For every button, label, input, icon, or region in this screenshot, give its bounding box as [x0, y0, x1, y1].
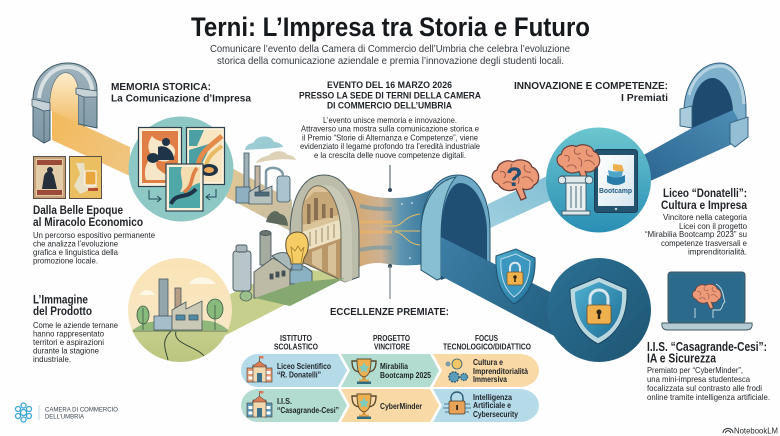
- heading: innovazione e competenze: INNOVAZIONE E COMPETENZE:: [514, 80, 668, 92]
- heading and text: immagine del prodotto: hanno rappresentato: [33, 328, 104, 338]
- connector: lower tunnel to eccellenze: [388, 264, 392, 299]
- heading: evento: PRESSO LA SEDE DI TERNI DELLA CAMERA: [299, 90, 481, 102]
- table row: donatelli: [241, 354, 539, 387]
- cell: istituto: I.I.S.: [277, 396, 292, 406]
- heading: memoria storica: La Comunicazione d’Impresa: [111, 92, 251, 104]
- right portal: [421, 175, 490, 280]
- heading: eccellenze premiate: ECCELLENZE PREMIATE:: [330, 306, 449, 318]
- table: column headers: PROGETTO: [373, 334, 410, 343]
- text: casagrande-cesi: online tramite intelligenza artificiale.: [647, 392, 770, 402]
- path: light blue innovation ribbon: [488, 170, 560, 229]
- icon: light bulb and lower factory: [233, 230, 345, 306]
- hill: [133, 320, 228, 330]
- cell: istituto: [241, 389, 347, 422]
- icon: right blue arch with ribbon: [640, 63, 748, 182]
- path: lower green ribbon: [226, 266, 345, 335]
- heading: evento: [299, 80, 481, 112]
- cell: focus: Immersiva: [473, 374, 507, 384]
- dark blue ribbon: [640, 110, 748, 182]
- heading and text: immagine del prodotto: territori e aspirazioni: [33, 337, 104, 347]
- text: evento description: Attraverso una mostra sulla comunicazione storica e: [301, 124, 479, 134]
- heading: memoria storica: MEMORIA STORICA:: [111, 81, 211, 93]
- table: column headers: ISTITUTO: [280, 334, 312, 343]
- column: [558, 176, 593, 215]
- icon: question brain: ?: [506, 162, 522, 192]
- river: [165, 331, 204, 360]
- text: evento description: evidenziato il legame profondo tra l’eredità industriale: [300, 141, 480, 151]
- icon: laptop with brain: [662, 272, 752, 330]
- clouds: [140, 290, 155, 295]
- path: lower blue ribbon: [441, 237, 562, 340]
- circle: bootcamp culture: [546, 128, 651, 232]
- cell: istituto: [241, 354, 347, 387]
- heading and text: belle epoque: [33, 203, 155, 266]
- factory: [154, 279, 202, 330]
- tunnel between past and future: [348, 186, 436, 272]
- heading: evento: DI COMMERCIO DELL’UMBRIA: [327, 100, 452, 112]
- bulb: [286, 232, 308, 264]
- text: liceo donatelli: imprenditorialità.: [688, 246, 747, 256]
- icon: upper factory: [236, 153, 290, 226]
- table: column headers: TECNOLOGICO/DIDATTICO: [443, 342, 531, 352]
- poster: teal: [186, 128, 224, 184]
- text: casagrande-cesi: [647, 340, 770, 402]
- heading and text: immagine del prodotto: Come le aziende ternane: [33, 320, 118, 330]
- heading and text: belle epoque: grafica e linguistica della: [33, 247, 118, 257]
- brain on column: [557, 145, 600, 182]
- logo: camera di commercio: DELL’UMBRIA: [45, 414, 85, 420]
- text: casagrande-cesi: Premiato per “CyberMinder”,: [647, 365, 743, 375]
- cell: istituto: “R. Donatelli”: [277, 370, 321, 380]
- trees: [137, 299, 223, 330]
- text: liceo donatelli: “Mirabilia Bootcamp 2023” su: [645, 229, 747, 239]
- cell: progetto: CyberMinder: [380, 401, 423, 411]
- circle: poster exhibition: [128, 116, 234, 222]
- circle: factory landscape: [128, 258, 232, 362]
- heading: memoria storica: [111, 81, 251, 104]
- table row: casagrande: [241, 389, 539, 422]
- text: evento description: L’evento unisce memoria e innovazione.: [323, 115, 457, 125]
- left portal with industrial scene: [290, 175, 359, 282]
- icon: left stone arch: [32, 63, 97, 143]
- logo: camera di commercio: CAMERA DI COMMERCIO: [45, 406, 118, 414]
- text: liceo donatelli: Cultura e Impresa: [661, 198, 747, 212]
- text: liceo donatelli: competenze trasversali e: [661, 238, 747, 248]
- cell: focus: Imprenditorialità: [473, 366, 528, 376]
- table: column headers: FOCUS: [475, 334, 499, 343]
- heading and text: belle epoque: Un percorso espositivo permanente: [33, 230, 155, 240]
- heading and text: immagine del prodotto: L’Immagine: [33, 292, 88, 306]
- cell: focus: Cybersecurity: [473, 409, 518, 419]
- poster: orange: [138, 128, 182, 186]
- text: liceo donatelli: [645, 186, 747, 256]
- tablet: Bootcamp: [599, 188, 632, 195]
- heading and text: belle epoque: promozione locale.: [33, 256, 98, 266]
- heading and text: belle epoque: Dalla Belle Epoque: [33, 203, 123, 217]
- cell: istituto: Liceo Scientifico: [277, 361, 331, 371]
- arrows in circle: [149, 190, 161, 202]
- subtitle: storica della comunicazione aziendale e premia l’innovazione degli studenti locali.: [217, 55, 564, 67]
- heading and text: immagine del prodotto: [33, 292, 118, 364]
- text: liceo donatelli: Vincitore nella categoria: [663, 212, 747, 222]
- cell: focus: [433, 389, 539, 422]
- icon: clouds: [245, 136, 296, 163]
- text: casagrande-cesi: una mini-impresa studentesca: [647, 374, 750, 384]
- text: liceo donatelli: Licei con il progetto: [679, 221, 747, 231]
- poster: centre: [166, 164, 203, 211]
- heading and text: belle epoque: che analizza l’evoluzione: [33, 238, 118, 248]
- cell: istituto: “Casagrande-Cesi”: [277, 405, 339, 415]
- cell: focus: Artificiale e: [473, 400, 511, 410]
- title: Terni: L’Impresa tra Storia e Futuro: [191, 12, 590, 42]
- cell: focus: Intelligenza: [473, 392, 512, 402]
- icon: small shield: [496, 249, 535, 304]
- table: column headers: SCOLASTICO: [274, 342, 318, 352]
- icon: question brain: [492, 160, 539, 200]
- heading and text: immagine del prodotto: del Prodotto: [33, 304, 92, 318]
- cell: progetto: [341, 389, 439, 422]
- text: casagrande-cesi: focalizzata sul contrasto alle frodi: [647, 383, 762, 393]
- text: liceo donatelli: Liceo “Donatelli”:: [663, 186, 747, 200]
- heading and text: immagine del prodotto: industriale.: [33, 354, 71, 364]
- subtitle: [210, 43, 570, 67]
- heading: innovazione e competenze: [514, 80, 668, 104]
- lower factory: [233, 230, 312, 298]
- text: evento description: [300, 115, 480, 160]
- cell: focus: Cultura e: [473, 357, 503, 367]
- heading: evento: EVENTO DEL 16 MARZO 2026: [327, 80, 452, 91]
- text: casagrande-cesi: IA e Sicurezza: [647, 352, 717, 366]
- heading and text: belle epoque: al Miracolo Economico: [33, 215, 143, 229]
- cell: progetto: Bootcamp 2025: [380, 370, 431, 380]
- logo: camera di commercio: [16, 403, 118, 422]
- connector: event to tunnel: [388, 165, 392, 192]
- text: evento description: il Premio “Storie di Alternanza e Competenze”, viene: [302, 132, 478, 142]
- cell: progetto: Mirabilia: [380, 361, 408, 371]
- icon: vintage posters: [34, 156, 102, 198]
- circle: shield security: [547, 258, 651, 362]
- subtitle: Comunicare l’evento della Camera di Commercio dell’Umbria che celebra l’evoluzione: [210, 43, 570, 55]
- cell: focus: [433, 354, 539, 387]
- path: yellow history ribbon: [52, 111, 292, 232]
- heading and text: immagine del prodotto: durante la stagione: [33, 346, 99, 356]
- cell: progetto: [341, 354, 439, 387]
- text: evento description: e la crescita delle nuove competenze digitali.: [314, 150, 466, 160]
- table: column headers: [274, 334, 531, 352]
- heading: innovazione e competenze: I Premiati: [621, 92, 668, 104]
- table: column headers: VINCITORE: [374, 342, 411, 352]
